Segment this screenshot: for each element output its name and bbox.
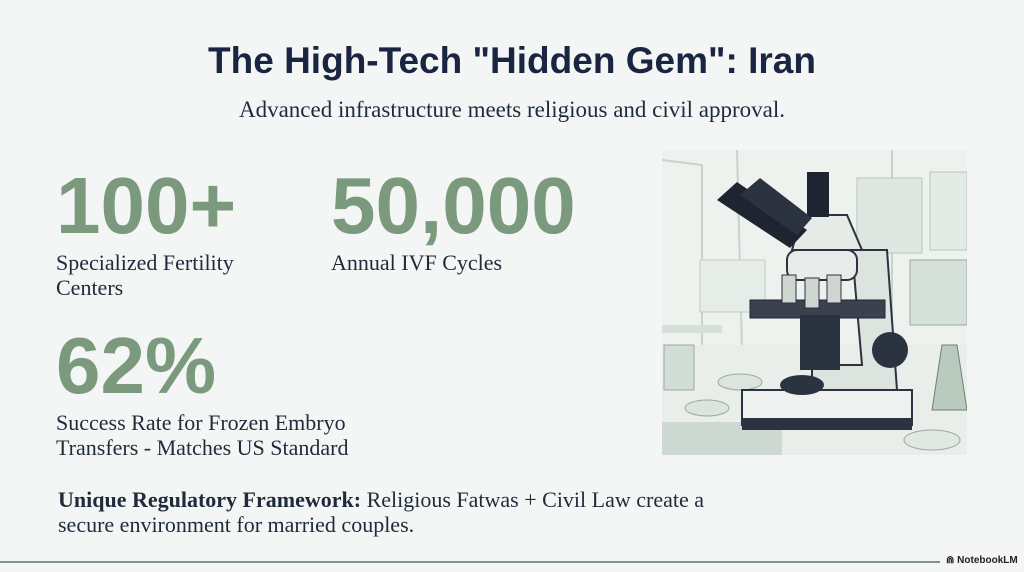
illustration: microscope [662, 150, 967, 455]
footer line [0, 561, 940, 563]
footer logo: ⋒ NotebookLM [946, 555, 1018, 566]
regulatory text: Unique Regulatory Framework: Religious Fatwas + Civil Law create a [58, 487, 704, 512]
stat: centers [56, 161, 236, 300]
stat: centers: Centers [56, 275, 123, 300]
title: The High-Tech "Hidden Gem": Iran [208, 40, 816, 81]
microscope body [812, 250, 897, 390]
regulatory text: secure environment for married couples. [58, 512, 414, 537]
stat: success rate [56, 321, 348, 460]
regulatory text [58, 487, 704, 537]
stat: cycles: Annual IVF Cycles [331, 250, 502, 275]
stat: cycles: 50,000 [331, 161, 576, 250]
stat: centers: 100+ [56, 161, 236, 250]
stat: success rate: 62% [56, 321, 216, 410]
subtitle: Advanced infrastructure meets religious and civil approval. [239, 97, 785, 122]
stat: success rate: Transfers - Matches US Standard [56, 435, 348, 460]
stat: centers: Specialized Fertility [56, 250, 234, 275]
stat: success rate: Success Rate for Frozen Embryo [56, 410, 346, 435]
